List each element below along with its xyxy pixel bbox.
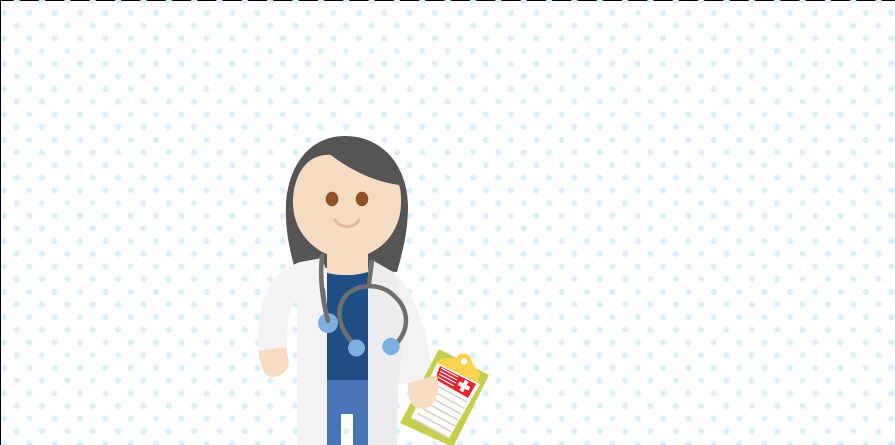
board [400, 349, 489, 445]
red header [435, 366, 476, 398]
ruled lines [414, 383, 467, 437]
right hand [408, 375, 438, 409]
trousers [327, 380, 368, 445]
stethoscope [318, 256, 406, 356]
eyes [326, 192, 368, 206]
lab coat left side [258, 258, 327, 445]
clipboard [400, 349, 489, 445]
lab coat right arm [370, 260, 433, 384]
illustration: doctor [258, 136, 489, 445]
hair [286, 136, 408, 272]
clip [436, 354, 480, 386]
lab coat right panel [368, 260, 403, 445]
left hand [258, 347, 289, 377]
shirt [327, 272, 368, 380]
clip hole [461, 358, 467, 365]
header lines [438, 368, 458, 386]
face and neck [293, 155, 401, 276]
paper [411, 363, 480, 438]
medical cross [459, 381, 469, 391]
smile [335, 220, 359, 227]
